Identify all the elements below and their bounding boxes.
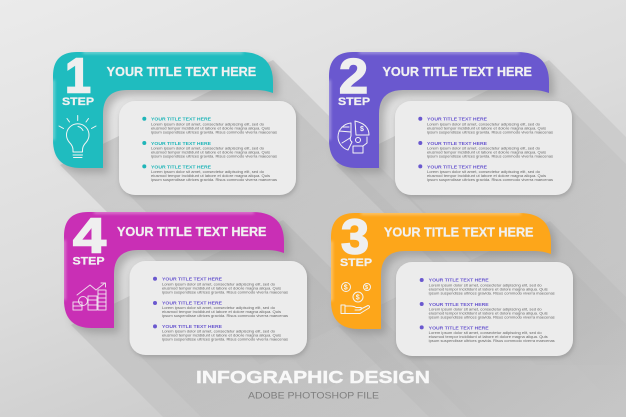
list item 1: eiusmod tempor incididunt ut labore et dolore magna aliqua. Quis — [427, 126, 546, 131]
icon: hand with coins: $ — [344, 284, 348, 292]
list item 3: Lorem ipsum dolor sit amet, consectetur adipiscing elit, sed do — [427, 169, 541, 174]
list item 2 — [420, 302, 555, 320]
panel: step 3 — [331, 210, 573, 356]
heading: YOUR TITLE TEXT HERE — [382, 65, 532, 79]
list item 2: Lorem ipsum dolor sit amet, consectetur adipiscing elit, sed do — [427, 146, 541, 150]
list item 3: eiusmod tempor incididunt ut labore et dolore magna aliqua. Quis — [151, 173, 270, 178]
list item 3: ipsum suspendisse ultrices gravida. Risus commodo viverra maecenas — [427, 177, 553, 182]
icon: rising coins chart — [73, 283, 106, 310]
step number 2: 2 — [339, 50, 368, 104]
icon: pie chart with investor: $ — [360, 126, 364, 133]
list item 1: Lorem ipsum dolor sit amet, consectetur adipiscing elit, sed do — [427, 122, 541, 127]
list item 2: ipsum suspendisse ultrices gravida. Risus commodo viverra maecenas — [427, 154, 553, 158]
panel: step 4 — [64, 210, 307, 355]
step number 1: 1 — [65, 50, 91, 104]
list item 2: YOUR TITLE TEXT HERE — [151, 141, 211, 146]
list item 2: eiusmod tempor incididunt ut labore et dolore magna aliqua. Quis — [429, 310, 548, 316]
heading: YOUR TITLE TEXT HERE — [117, 225, 266, 239]
list item 2: YOUR TITLE TEXT HERE — [162, 301, 222, 306]
list item 2 — [153, 301, 288, 318]
list item 3: YOUR TITLE TEXT HERE — [429, 325, 489, 330]
list item 1: ipsum suspendisse ultrices gravida. Risus commodo viverra maecenas — [429, 291, 555, 296]
list item 3: YOUR TITLE TEXT HERE — [151, 164, 211, 169]
step label: STEP — [338, 96, 370, 108]
list item 3: ipsum suspendisse ultrices gravida. Risus commodo viverra maecenas — [429, 338, 555, 343]
step label: STEP — [340, 257, 372, 269]
list item 3: Lorem ipsum dolor sit amet, consectetur adipiscing elit, sed do — [429, 330, 542, 335]
list item 1: Lorem ipsum dolor sit amet, consectetur adipiscing elit, sed do — [429, 283, 542, 288]
list item 1: Lorem ipsum dolor sit amet, consectetur adipiscing elit, sed do — [151, 122, 265, 127]
subtitle: ADOBE PHOTOSHOP FILE — [248, 390, 379, 400]
main title: INFOGRAPHIC DESIGN — [196, 367, 430, 387]
list item 2: eiusmod tempor incididunt ut labore et dolore magna aliqua. Quis — [162, 309, 281, 314]
list item 2: YOUR TITLE TEXT HERE — [427, 141, 487, 146]
list item 3: YOUR TITLE TEXT HERE — [427, 164, 487, 169]
list item 2: YOUR TITLE TEXT HERE — [429, 302, 489, 307]
list item 2: Lorem ipsum dolor sit amet, consectetur adipiscing elit, sed do — [151, 146, 265, 150]
list item 3: eiusmod tempor incididunt ut labore et dolore magna aliqua. Quis — [162, 333, 281, 338]
list item 3: ipsum suspendisse ultrices gravida. Risus commodo viverra maecenas — [151, 177, 277, 182]
card: step 2 content — [395, 101, 572, 195]
step number 4: 4 — [73, 210, 106, 264]
panel: step 1 — [53, 50, 296, 195]
list item 3 — [142, 164, 277, 182]
list item 1: eiusmod tempor incididunt ut labore et dolore magna aliqua. Quis — [162, 285, 281, 290]
card: step 3 content — [396, 262, 573, 356]
list item 1: ipsum suspendisse ultrices gravida. Risus commodo viverra maecenas — [427, 130, 553, 135]
list item 2: ipsum suspendisse ultrices gravida. Risus commodo viverra maecenas — [162, 313, 288, 318]
list item 2: ipsum suspendisse ultrices gravida. Risus commodo viverra maecenas — [429, 314, 555, 320]
icon: hand with coins — [341, 282, 370, 314]
list item 1: Lorem ipsum dolor sit amet, consectetur adipiscing elit, sed do — [162, 281, 276, 286]
list item 1: eiusmod tempor incididunt ut labore et dolore magna aliqua. Quis — [429, 287, 548, 292]
step label: STEP — [72, 256, 104, 268]
card: step 1 content — [119, 101, 296, 195]
list item 2 — [142, 141, 277, 158]
list item 3 — [420, 325, 555, 343]
heading: YOUR TITLE TEXT HERE — [384, 226, 534, 240]
list item 1 — [418, 117, 553, 135]
list item 3: Lorem ipsum dolor sit amet, consectetur adipiscing elit, sed do — [162, 329, 276, 334]
list item 2 — [418, 141, 553, 158]
list item 1 — [420, 278, 555, 296]
icon: light bulb — [59, 116, 96, 158]
list item 1: eiusmod tempor incididunt ut labore et dolore magna aliqua. Quis — [151, 126, 270, 131]
list item 3 — [153, 324, 288, 342]
step label: STEP — [62, 96, 94, 108]
heading: YOUR TITLE TEXT HERE — [107, 65, 256, 79]
list item 3: YOUR TITLE TEXT HERE — [162, 324, 222, 329]
list item 3 — [418, 164, 553, 182]
icon: hand with coins: $ — [356, 294, 360, 302]
list item 1: YOUR TITLE TEXT HERE — [429, 278, 489, 283]
list item 3: ipsum suspendisse ultrices gravida. Risus commodo viverra maecenas — [162, 337, 288, 342]
list item 2: Lorem ipsum dolor sit amet, consectetur adipiscing elit, sed do — [429, 306, 542, 312]
icon: hand with coins: $ — [365, 285, 368, 291]
list item 3: eiusmod tempor incididunt ut labore et dolore magna aliqua. Quis — [427, 173, 546, 178]
list item 1: ipsum suspendisse ultrices gravida. Risus commodo viverra maecenas — [151, 130, 277, 135]
panel: step 2 — [329, 50, 572, 195]
list item 2: Lorem ipsum dolor sit amet, consectetur adipiscing elit, sed do — [162, 305, 276, 310]
icon: pie chart with investor — [338, 121, 369, 153]
list item 1 — [153, 276, 288, 294]
list item 1: YOUR TITLE TEXT HERE — [151, 117, 211, 122]
list item 2: eiusmod tempor incididunt ut labore et dolore magna aliqua. Quis — [427, 150, 546, 154]
list item 1: YOUR TITLE TEXT HERE — [162, 276, 222, 281]
list item 2: ipsum suspendisse ultrices gravida. Risus commodo viverra maecenas — [151, 154, 277, 158]
list item 3: eiusmod tempor incididunt ut labore et dolore magna aliqua. Quis — [429, 334, 548, 339]
list item 1: YOUR TITLE TEXT HERE — [427, 117, 487, 122]
list item 1: ipsum suspendisse ultrices gravida. Risus commodo viverra maecenas — [162, 289, 288, 294]
list item 3: Lorem ipsum dolor sit amet, consectetur adipiscing elit, sed do — [151, 169, 265, 174]
step number 3: 3 — [341, 210, 369, 264]
list item 2: eiusmod tempor incididunt ut labore et dolore magna aliqua. Quis — [151, 150, 270, 154]
card: step 4 content — [130, 261, 307, 355]
list item 1 — [142, 117, 277, 135]
